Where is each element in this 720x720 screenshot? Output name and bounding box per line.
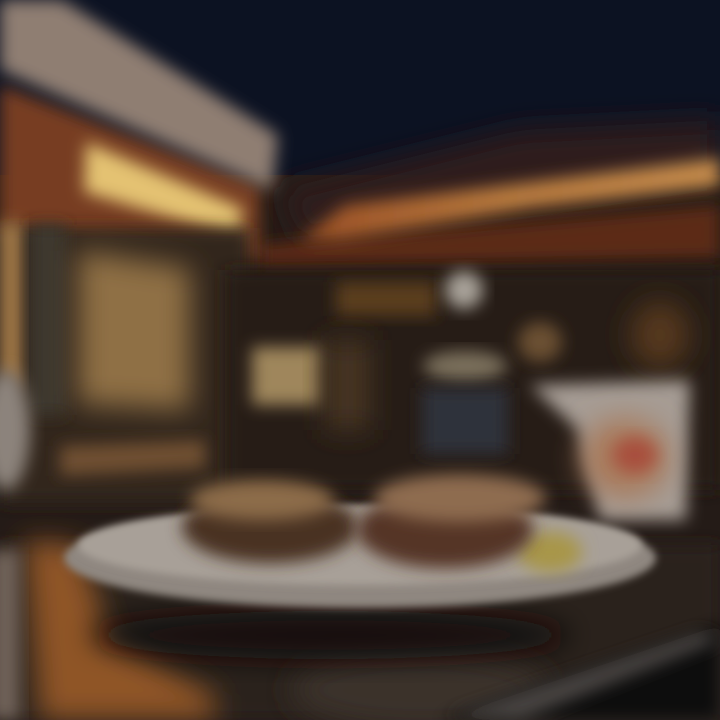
interior: amber sign (336, 282, 436, 316)
left burger (182, 480, 358, 563)
window sill glow (60, 440, 205, 476)
left building: lower dark facade (0, 228, 250, 503)
right roof: brown underside (260, 205, 720, 268)
table centre lighter area (290, 650, 550, 720)
drink red highlight (613, 437, 657, 473)
interior: glowing panel (252, 347, 322, 405)
left bun (190, 480, 334, 520)
drink cup (530, 380, 690, 520)
main window (78, 250, 190, 410)
table foreground (0, 545, 720, 720)
table orange reflection (25, 540, 215, 720)
interior: brown patch (325, 340, 370, 430)
right bun (374, 474, 546, 522)
left window pane (0, 222, 22, 390)
left pale edge object (0, 370, 30, 490)
night sky (0, 0, 720, 175)
bottom right dark table edge (440, 625, 720, 720)
interior: dark middle section (225, 270, 720, 490)
plate (64, 474, 656, 608)
left pale table edge (0, 550, 20, 720)
yellow garnish (518, 532, 582, 572)
left building: beige awning (0, 0, 278, 190)
dark shadow below plate (90, 611, 570, 659)
interior: blue-grey machine (422, 388, 508, 454)
left column (30, 225, 66, 415)
interior: white lamp (445, 271, 483, 309)
right roof: dark upper edge (280, 120, 720, 240)
left building: yellow light strip (84, 142, 242, 238)
interior: warm light (518, 322, 562, 362)
right burger (357, 474, 546, 568)
right roof: glowing orange band (300, 158, 720, 240)
left building: orange wall (0, 85, 260, 262)
plate surface (78, 505, 642, 585)
bottom right pale streak (450, 632, 720, 720)
interior: warm right patch (630, 301, 690, 369)
interior: pale counter (423, 351, 507, 381)
drink liquid (581, 418, 669, 498)
